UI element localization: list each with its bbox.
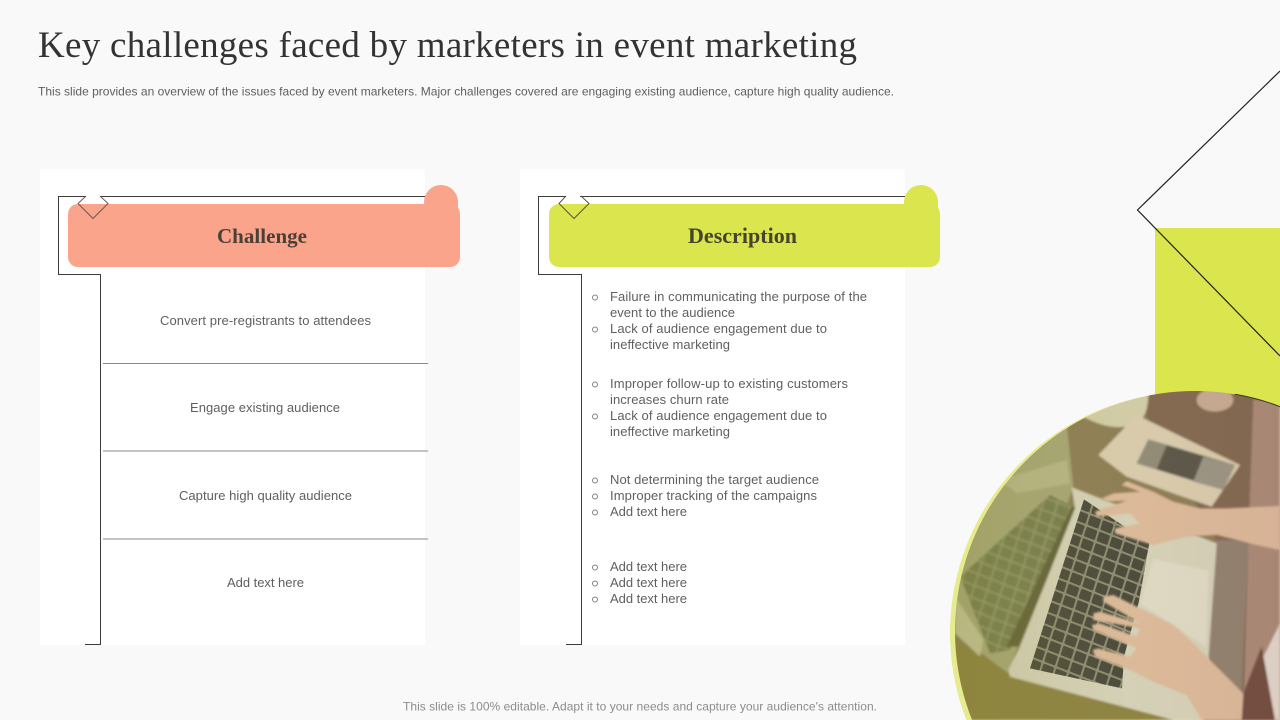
- lower hand and arm: [1092, 595, 1270, 720]
- panel background: [40, 169, 425, 645]
- diamond marker: [559, 196, 589, 218]
- title: Key challenges faced by marketers in event marketing: [38, 25, 857, 66]
- header bar: [549, 185, 940, 267]
- row: add text: Add text here: [227, 575, 304, 590]
- right cloth: [1263, 623, 1280, 720]
- panel: challenge: [40, 169, 460, 645]
- header bar: [68, 185, 460, 267]
- bullet group 2: increases churn rate: [610, 392, 729, 407]
- cup: [1083, 390, 1148, 427]
- trackpad: [1140, 559, 1209, 647]
- bullet group 4: Add text here: [610, 559, 687, 574]
- bullet group 2: [592, 376, 848, 439]
- bullet group 2: ineffective marketing: [610, 424, 730, 439]
- row: engage: Engage existing audience: [190, 400, 340, 415]
- bullet group 4: [592, 559, 687, 606]
- laptop base: [1008, 487, 1217, 720]
- bullet group 3: Add text here: [610, 504, 687, 519]
- row: capture: Capture high quality audience: [179, 488, 352, 503]
- photo top edge: [1235, 394, 1280, 407]
- panel: description: [520, 169, 940, 645]
- bullet group 2: Lack of audience engagement due to: [610, 408, 827, 423]
- subtitle: This slide provides an overview of the issues faced by event marketers. Major challenges covered are engaging existing audience, capture high quality audience.: [38, 84, 894, 98]
- panel background: [520, 169, 905, 645]
- bullet group 1: [592, 289, 867, 352]
- bullet group 3: Improper tracking of the campaigns: [610, 488, 818, 503]
- phone: [1155, 444, 1228, 482]
- bullet group 1: Failure in communicating the purpose of the: [610, 289, 867, 304]
- diamond marker: [78, 196, 108, 218]
- lime crescent behind photo: [950, 392, 1280, 720]
- bullet group 3: [592, 472, 819, 519]
- bullet group 1: event to the audience: [610, 305, 735, 320]
- bracket outline: [538, 196, 905, 644]
- bullet group 3: Not determining the target audience: [610, 472, 819, 487]
- notebook: [1098, 415, 1240, 507]
- row: convert: Convert pre-registrants to attendees: [160, 313, 372, 328]
- upper hand and arm: [1095, 481, 1280, 550]
- footer note: This slide is 100% editable. Adapt it to your needs and capture your audience's attention.: [403, 700, 877, 714]
- diamond line decoration: [1138, 71, 1280, 356]
- screen reflection: [955, 425, 1073, 673]
- bullet group 4: Add text here: [610, 591, 687, 606]
- table surfaces: [955, 391, 1240, 720]
- bracket outline: [58, 196, 425, 644]
- keyboard: [1030, 499, 1149, 688]
- colour wash: [955, 408, 1280, 720]
- hinge shadow: [1007, 506, 1077, 647]
- lime rectangle: [1155, 228, 1280, 428]
- bullet group 1: Lack of audience engagement due to: [610, 321, 827, 336]
- header bar: Challenge: [217, 224, 307, 248]
- header bar: Description: [688, 223, 797, 248]
- bullet group 1: ineffective marketing: [610, 337, 730, 352]
- photo: hands typing on a laptop: [940, 380, 1280, 720]
- bullet group 2: Improper follow-up to existing customers: [610, 376, 848, 391]
- bullet group 4: Add text here: [610, 575, 687, 590]
- row separators: [103, 364, 428, 539]
